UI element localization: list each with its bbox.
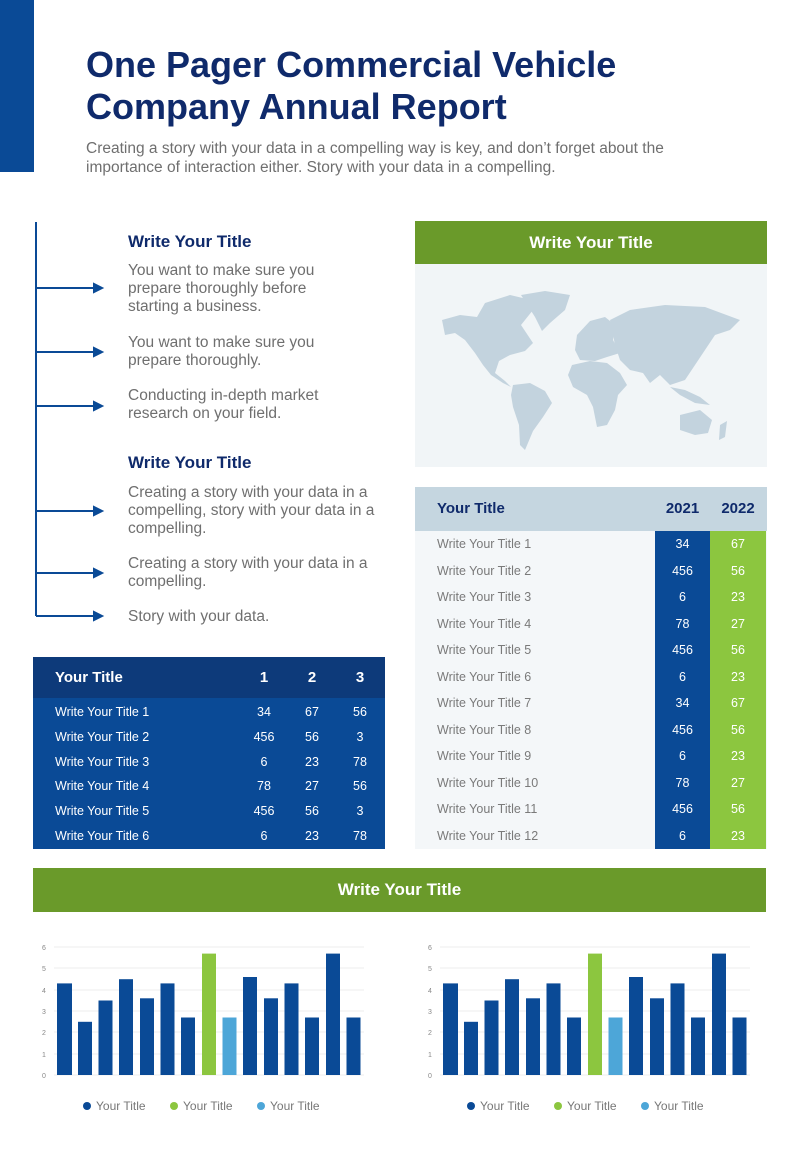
table: years: Write Your Title 11 — [437, 802, 537, 816]
bar chart right: 1 — [428, 1052, 432, 1059]
timeline: Story with your data. — [128, 608, 269, 625]
table: left blue: 3 — [357, 730, 363, 744]
text items: You want to make sure you prepare thoroughly before starting a business. — [128, 262, 314, 315]
table: left blue: 1 — [260, 669, 268, 686]
table: left blue: Write Your Title 2 — [55, 730, 149, 744]
table: years: 2021 — [666, 500, 699, 517]
table: years: 56 — [731, 564, 745, 578]
bar chart left: 4 — [42, 988, 46, 995]
timeline: Creating a story with your data in a compelling. — [128, 555, 368, 590]
table: left blue: 23 — [305, 829, 319, 843]
table: left blue: 78 — [257, 779, 271, 793]
table: left blue: 23 — [305, 755, 319, 769]
table: years: 6 — [679, 590, 686, 604]
table: years: 34 — [676, 537, 689, 551]
table: years: 67 — [731, 696, 745, 710]
table: years: Write Your Title 4 — [437, 616, 531, 630]
bar chart left: 3 — [42, 1009, 46, 1016]
panel: map: Write Your Title — [529, 233, 653, 252]
table: left blue: Your Title — [55, 669, 123, 686]
bar chart right: 2 — [428, 1030, 432, 1037]
table: years: 456 — [672, 564, 693, 578]
bar chart right: Your Title — [567, 1099, 617, 1113]
table: years: 56 — [731, 802, 745, 816]
bar chart left: 2 — [42, 1030, 46, 1037]
bar chart right: Your Title — [654, 1099, 704, 1113]
table: left blue: Write Your Title 5 — [55, 804, 149, 818]
bar chart left: Your Title — [96, 1099, 146, 1113]
bar chart left: 1 — [42, 1052, 46, 1059]
bar chart right: 5 — [428, 966, 432, 973]
table: years: 56 — [731, 722, 745, 736]
table: left blue: 34 — [257, 705, 271, 719]
table: years: 456 — [672, 722, 693, 736]
table: years: 6 — [679, 670, 686, 684]
subtitle: Creating a story with your data in a compelling way is key, and don’t forget about the importance of interaction either. Story with your data in a compelling. — [86, 140, 664, 176]
table: years: Write Your Title 3 — [437, 590, 531, 604]
table: years: Write Your Title 10 — [437, 776, 538, 790]
bar chart right: 0 — [428, 1073, 432, 1080]
table: left blue: 3 — [357, 804, 363, 818]
table: years: Write Your Title 9 — [437, 749, 531, 763]
accent bar — [0, 0, 34, 172]
table: years: Write Your Title 12 — [437, 828, 538, 842]
bar chart left: 6 — [42, 945, 46, 952]
table: left blue: 456 — [254, 804, 274, 818]
timeline — [35, 222, 374, 625]
table: years: 23 — [731, 590, 745, 604]
banner: charts title — [33, 868, 766, 912]
table: left blue: 56 — [353, 779, 367, 793]
title: One Pager Commercial Vehicle Company Annual Report — [86, 44, 616, 127]
table: years: Write Your Title 5 — [437, 643, 531, 657]
table: years: 27 — [731, 776, 745, 790]
table: left blue: 27 — [305, 779, 319, 793]
table: left blue: 56 — [305, 730, 319, 744]
heading 2: Write Your Title — [128, 453, 251, 472]
table: years: 6 — [679, 749, 686, 763]
table: years: Write Your Title 7 — [437, 696, 531, 710]
heading 1: Write Your Title — [128, 232, 251, 251]
table: left blue — [33, 657, 385, 849]
table: years: 67 — [731, 537, 745, 551]
bar chart left: Your Title — [183, 1099, 233, 1113]
table: years: 34 — [676, 696, 689, 710]
table: years: Write Your Title 1 — [437, 537, 531, 551]
timeline: You want to make sure you prepare thoroughly. — [128, 334, 314, 369]
table: years: 456 — [672, 643, 693, 657]
table: years: 456 — [672, 802, 693, 816]
table: years: 56 — [731, 643, 745, 657]
table: years: Write Your Title 6 — [437, 670, 531, 684]
timeline: Conducting in-depth market research on your field. — [128, 387, 318, 422]
bar chart right: 6 — [428, 945, 432, 952]
bar chart right: 4 — [428, 988, 432, 995]
table: left blue: 2 — [308, 669, 316, 686]
table: years: Write Your Title 8 — [437, 722, 531, 736]
table: years: Your Title — [437, 500, 505, 517]
table: left blue: Write Your Title 4 — [55, 779, 149, 793]
bar chart right: 3 — [428, 1009, 432, 1016]
table: left blue: 78 — [353, 829, 367, 843]
table: years: 23 — [731, 828, 745, 842]
table: years: 6 — [679, 828, 686, 842]
table: years: 23 — [731, 749, 745, 763]
table: left blue: Write Your Title 6 — [55, 829, 149, 843]
bar chart left: 5 — [42, 966, 46, 973]
world map — [442, 291, 740, 450]
table: left blue: 6 — [261, 829, 267, 843]
panel: map — [415, 221, 767, 467]
table: years: 27 — [731, 616, 745, 630]
table: years: 2022 — [721, 500, 755, 517]
bar chart left: 0 — [42, 1073, 46, 1080]
table: years: Write Your Title 2 — [437, 564, 531, 578]
table: years: 23 — [731, 670, 745, 684]
table: left blue: 67 — [305, 705, 319, 719]
bar chart right: Your Title — [480, 1099, 530, 1113]
table: left blue: 56 — [353, 705, 367, 719]
bar chart left: Your Title — [270, 1099, 320, 1113]
table: left blue: 3 — [356, 669, 364, 686]
banner: charts title: Write Your Title — [338, 880, 461, 899]
table: left blue: 456 — [254, 730, 274, 744]
table: left blue: 6 — [261, 755, 267, 769]
table: left blue: 78 — [353, 755, 367, 769]
timeline: Creating a story with your data in a compelling, story with your data in a compelling. — [128, 484, 374, 537]
bar chart left — [42, 945, 364, 1113]
table: years: 78 — [676, 616, 689, 630]
table: left blue: Write Your Title 3 — [55, 755, 149, 769]
table: left blue: 56 — [305, 804, 319, 818]
bar chart right — [428, 945, 750, 1113]
table: left blue: Write Your Title 1 — [55, 705, 149, 719]
table: years — [415, 487, 767, 849]
table: years: 78 — [676, 776, 689, 790]
